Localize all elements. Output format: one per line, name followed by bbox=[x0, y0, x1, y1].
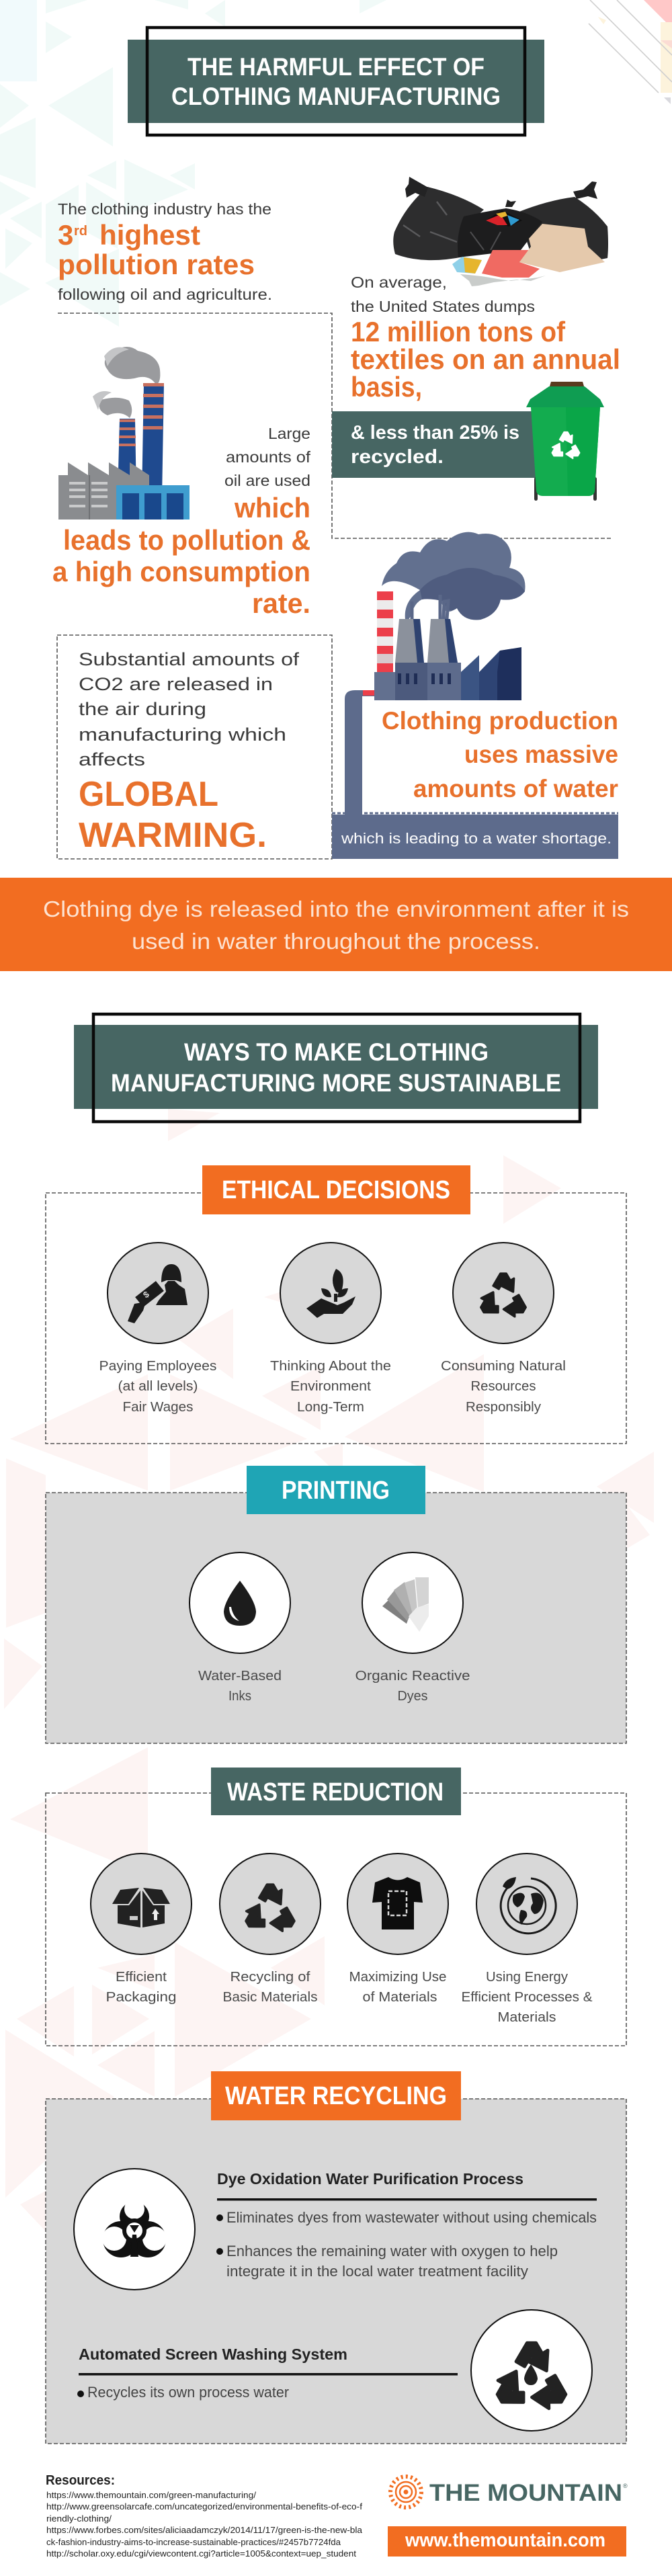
text block: oil leads to pollution: Large bbox=[268, 425, 310, 442]
text block: massive amounts of water: Clothing production bbox=[382, 707, 618, 735]
heading: ways to make clothing manufacturing more sustainable bbox=[74, 1014, 598, 1122]
panel: water shortage: which is leading to a water shortage. bbox=[341, 830, 612, 847]
website button bbox=[388, 2526, 626, 2557]
text block: dye oxidation: integrate it in the local water treatment facility bbox=[226, 2263, 528, 2280]
background: mint triangles top left bbox=[0, 0, 386, 327]
banner: clothing dye: Clothing dye is released into the environment after it is bbox=[43, 897, 629, 921]
text block: oil leads to pollution: oil are used bbox=[224, 472, 310, 489]
panel: global warming: CO2 are released in bbox=[79, 674, 273, 694]
icon: cardboard box bbox=[91, 1854, 192, 1954]
banner: clothing dye: used in water throughout the process. bbox=[132, 929, 540, 954]
label: paying employees: (at all levels) bbox=[118, 1379, 198, 1394]
icon: biohazard symbol bbox=[74, 2169, 195, 2290]
tag: water recycling: WATER RECYCLING bbox=[225, 2082, 447, 2110]
label: using energy efficient processes bbox=[461, 1970, 593, 2025]
text block: oil leads to pollution: leads to pollution & bbox=[63, 524, 310, 556]
banner: clothing dye bbox=[0, 878, 672, 971]
resources list: Resources: bbox=[46, 2473, 115, 2488]
text block: 3rd highest pollution rates: pollution rates bbox=[58, 249, 255, 280]
label: maximizing use of materials: of Materials bbox=[363, 1990, 437, 2005]
text block: massive amounts of water bbox=[382, 707, 618, 802]
icon: t-shirt bbox=[347, 1854, 448, 1954]
icon: water recycling symbol bbox=[471, 2310, 592, 2431]
text block: automated screen washing: Recycles its own process water bbox=[87, 2384, 289, 2401]
icon: recycling basic materials bbox=[220, 1854, 321, 1954]
label: water-based inks: Water-Based bbox=[198, 1669, 282, 1684]
title banner: THE HARMFUL EFFECT OF bbox=[187, 53, 485, 81]
label: recycling of basic materials bbox=[223, 1970, 317, 2005]
resources list: http://scholar.oxy.edu/cgi/viewcontent.cgi?article=1005&context=uep_student bbox=[46, 2548, 356, 2559]
clothes pile bbox=[452, 224, 605, 286]
icon: ink drop bbox=[190, 1552, 290, 1653]
text block: 12 million tons: basis, bbox=[351, 371, 422, 403]
text block: 12 million tons: the United States dumps bbox=[351, 298, 535, 315]
label: recycling of basic materials: Basic Materials bbox=[223, 1990, 317, 2005]
label: maximizing use of materials: Maximizing Use bbox=[349, 1970, 446, 1985]
panel: less than 25% recycled: & less than 25% is bbox=[351, 422, 519, 444]
middle bag bbox=[458, 200, 542, 257]
background: top-right corner accents bbox=[589, 0, 672, 104]
label: efficient packaging: Efficient bbox=[116, 1970, 167, 1985]
text block: 3rd highest pollution rates bbox=[58, 200, 272, 303]
website button: www.themountain.com bbox=[405, 2530, 605, 2551]
text block: 3rd highest pollution rates: highest bbox=[99, 219, 200, 251]
panel: water recycling bbox=[46, 2071, 626, 2444]
text block: dye oxidation: Dye Oxidation Water Purification Process bbox=[217, 2170, 523, 2188]
label: efficient packaging: Packaging bbox=[106, 1990, 176, 2005]
icon: recycling symbol bbox=[453, 1243, 554, 1343]
title banner bbox=[128, 28, 544, 135]
panel: less than 25% recycled bbox=[332, 411, 540, 478]
resources list bbox=[46, 2473, 363, 2559]
label: paying employees: Fair Wages bbox=[122, 1400, 194, 1415]
panel: global warming bbox=[57, 635, 332, 859]
text block: dye oxidation: Eliminates dyes from wastewater without using chemicals bbox=[226, 2209, 597, 2226]
text block: dye oxidation bbox=[216, 2170, 597, 2280]
label: paying employees bbox=[99, 1359, 216, 1415]
text block: oil leads to pollution: a high consumption bbox=[52, 556, 310, 587]
logo: the mountain: THE MOUNTAIN bbox=[429, 2480, 622, 2506]
text block: oil leads to pollution: amounts of bbox=[226, 448, 311, 466]
panel: global warming: manufacturing which bbox=[79, 724, 286, 745]
tag: waste reduction bbox=[211, 1768, 461, 1815]
icon: energy-efficient globe bbox=[476, 1854, 577, 1954]
tag: waste reduction: WASTE REDUCTION bbox=[227, 1778, 444, 1806]
label: organic reactive dyes: Organic Reactive bbox=[355, 1669, 470, 1684]
label: paying employees: Paying Employees bbox=[99, 1359, 216, 1374]
icon: hand holding plant bbox=[280, 1243, 381, 1343]
resources list: https://www.forbes.com/sites/aliciaadamczyk/2014/11/17/green-is-the-new-bla bbox=[46, 2525, 363, 2535]
text block: 12 million tons: textiles on an annual bbox=[351, 343, 620, 375]
title banner: CLOTHING MANUFACTURING bbox=[171, 83, 501, 110]
panel: printing bbox=[46, 1466, 626, 1743]
panel: less than 25% recycled: recycled. bbox=[351, 446, 444, 468]
panel: global warming: GLOBAL bbox=[79, 775, 218, 814]
background: pink triangles bbox=[4, 1109, 654, 2231]
icon: factory with blue chimneys bbox=[58, 347, 190, 520]
text block: oil leads to pollution bbox=[52, 425, 311, 619]
label: maximizing use of materials bbox=[349, 1970, 446, 2005]
logo: the mountain bbox=[390, 2477, 628, 2507]
label: consuming natural resources: Resources bbox=[470, 1379, 536, 1394]
text block: massive amounts of water: uses massive bbox=[464, 741, 618, 768]
text block: oil leads to pollution: rate. bbox=[252, 587, 310, 619]
label: thinking about the environment: Long-Term bbox=[297, 1400, 364, 1415]
tag: printing: PRINTING bbox=[282, 1477, 390, 1505]
label: using energy efficient processes: Materials bbox=[497, 2010, 556, 2025]
label: thinking about the environment bbox=[270, 1359, 391, 1415]
label: organic reactive dyes: Dyes bbox=[398, 1689, 427, 1704]
icon: factory with smoke cloud bbox=[345, 532, 526, 817]
label: using energy efficient processes: Using Energy bbox=[486, 1970, 568, 1985]
icon: garbage bags and clothes bbox=[393, 177, 608, 286]
icon: paying employees bbox=[108, 1243, 208, 1343]
label: consuming natural resources: Responsibly bbox=[466, 1400, 541, 1415]
heading: ways to make clothing manufacturing more sustainable: WAYS TO MAKE CLOTHING bbox=[184, 1038, 489, 1066]
panel: global warming: the air during bbox=[79, 699, 206, 719]
text block: massive amounts of water: amounts of water bbox=[413, 775, 618, 802]
tag: water recycling bbox=[211, 2071, 461, 2120]
resources list: riendly-clothing/ bbox=[46, 2513, 112, 2524]
text block: dye oxidation: Enhances the remaining water with oxygen to help bbox=[226, 2243, 558, 2259]
resources list: https://www.themountain.com/green-manufacturing/ bbox=[46, 2490, 256, 2500]
label: water-based inks bbox=[198, 1669, 282, 1704]
label: recycling of basic materials: Recycling of bbox=[230, 1970, 310, 1985]
icon: paying employees: $ bbox=[141, 1289, 151, 1300]
text block: oil leads to pollution: which bbox=[234, 492, 310, 524]
text block: 12 million tons bbox=[351, 274, 620, 403]
panel: global warming: affects bbox=[79, 749, 145, 770]
label: using energy efficient processes: Efficient Processes & bbox=[461, 1990, 593, 2005]
icon: green recycling bin bbox=[526, 382, 604, 501]
text block: 3rd highest pollution rates: The clothing industry has the bbox=[58, 200, 271, 218]
tag: ethical decisions: ETHICAL DECISIONS bbox=[222, 1176, 450, 1204]
logo: the mountain: ® bbox=[623, 2483, 628, 2489]
label: efficient packaging bbox=[106, 1970, 176, 2005]
resources list: http://www.greensolarcafe.com/uncategorized/environmental-benefits-of-eco-f bbox=[46, 2501, 362, 2511]
label: organic reactive dyes bbox=[355, 1669, 470, 1704]
label: consuming natural resources bbox=[441, 1359, 566, 1415]
text block: 12 million tons: 12 million tons of bbox=[351, 316, 566, 347]
right bag bbox=[517, 181, 608, 261]
label: thinking about the environment: Environment bbox=[290, 1379, 371, 1394]
text block: automated screen washing: Automated Screen Washing System bbox=[79, 2345, 347, 2363]
text block: automated screen washing bbox=[77, 2345, 458, 2401]
icon: dye swatch fan bbox=[362, 1552, 463, 1653]
label: consuming natural resources: Consuming Natural bbox=[441, 1359, 566, 1374]
panel: waste reduction bbox=[46, 1768, 626, 2046]
panel: water shortage bbox=[332, 813, 618, 859]
text block: 12 million tons: On average, bbox=[351, 274, 447, 291]
panel: global warming: WARMING. bbox=[79, 816, 267, 855]
tag: ethical decisions bbox=[202, 1165, 470, 1214]
left bag bbox=[393, 177, 484, 260]
heading: ways to make clothing manufacturing more sustainable: MANUFACTURING MORE SUSTAINABLE bbox=[111, 1069, 561, 1097]
text block: 3rd highest pollution rates: rd bbox=[74, 224, 87, 239]
text block: 3rd highest pollution rates: 3 bbox=[58, 219, 73, 251]
resources list: ck-fashion-industry-aims-to-increase-sustainable-practices/#2457b7724fda bbox=[46, 2537, 341, 2547]
panel: ethical decisions bbox=[46, 1165, 626, 1444]
panel: global warming: Substantial amounts of bbox=[79, 649, 300, 669]
tag: printing bbox=[247, 1466, 425, 1514]
dashed connector: central divider bbox=[58, 313, 613, 538]
label: thinking about the environment: Thinking About the bbox=[270, 1359, 391, 1374]
label: water-based inks: Inks bbox=[228, 1689, 251, 1704]
text block: 3rd highest pollution rates: following oil and agriculture. bbox=[58, 286, 272, 303]
